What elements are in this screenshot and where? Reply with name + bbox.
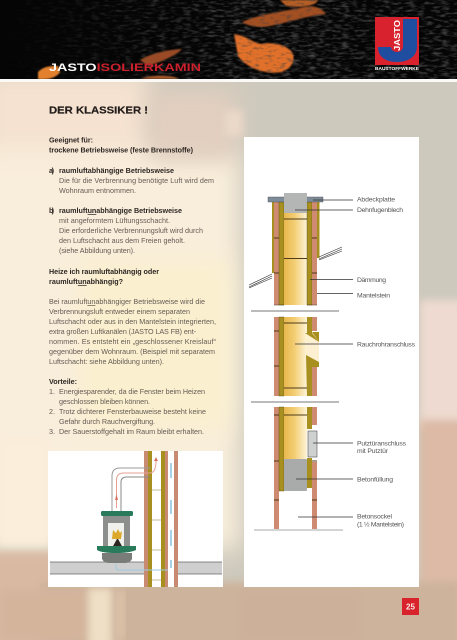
labels: Dämmung [357,277,386,284]
text block: advantages: Vorteile: [49,377,77,386]
subheading: question: Heize ich raumluftabhängig oder [49,267,159,276]
labels: Betonsockel [357,514,392,520]
logo: JASTO Baustoffwerke: BAUSTOFFWERKE [375,66,419,71]
fresh air duct with arrows [116,463,171,570]
labels: mit Putztür [357,448,389,455]
text block: b) room-air independent operation: raumluftunabhängige Betriebsweise [59,206,182,215]
text block: explanation: Verbrennungsluft entweder einem separaten [49,307,190,316]
text block: b) room-air independent operation: den Luftschacht aus dem Freien geholt. [59,236,185,245]
labels: (1 ½ Mantelstein) [357,520,404,528]
labels: Putztüranschluss [357,440,407,448]
white strip under header [0,79,457,82]
logo: JASTO Baustoffwerke: JASTO [393,20,402,51]
text block: b) room-air independent operation: Die erforderliche Verbrennungsluft wird durch [59,226,203,235]
text block: a) room-air dependent operation: raumluftabhängige Betriebsweise [59,166,174,175]
text block: advantages: 1. [49,387,55,396]
labels: Dehnfugenblech [357,207,403,214]
text block: a) room-air dependent operation: Die für die Verbrennung benötigte Luft wird dem [59,176,214,185]
panel: stove and chimney diagram [48,451,223,587]
labels: Rauchrohranschluss [357,342,416,348]
text block: b) room-air independent operation: mit angeformtem Lüftungsschacht. [59,216,170,225]
subheading: question [49,267,159,286]
logo: JASTO Baustoffwerke [375,17,419,71]
labels: Mantelstein [357,292,390,300]
text block: advantages: Trotz dichterer Fensterbauweise besteht keine [59,407,206,416]
text block: explanation [49,297,217,366]
text block: explanation: extra großen Luftkanälen (JASTO LAS FB) ent- [49,327,197,336]
heading: Der Klassiker: DER KLASSIKER ! [49,106,148,116]
text block: explanation: Luftschacht oder aus in den Mantelstein integrierten, [49,317,216,326]
panel: chimney cross-section [244,137,419,587]
text block: explanation: gegenüber dem Wohnraum. (Beispiel mit separatem [49,347,215,356]
text block: advantages: Der Sauerstoffgehalt im Raum bleibt erhalten. [59,427,204,436]
header band: dark fire photo [0,0,457,79]
text block: advantages: Energiesparender, da die Fenster beim Heizen [59,387,205,396]
text block: advantages: geschlossen bleiben können. [59,397,150,406]
text block: b) room-air independent operation: b) [49,206,55,215]
chimney shaft [144,451,178,587]
text block: advantages: 3. [49,427,55,436]
text block: a) room-air dependent operation [49,166,214,195]
floor slab [50,562,222,574]
header title: JASTO ISOLIERKAMIN: JASTO ISOLIERKAMIN [49,62,201,74]
text block: suitability [49,136,194,154]
text block: advantages [49,377,206,436]
text block: explanation: Bei raumluftunabhängiger Betriebsweise wird die [49,297,205,306]
chimney lower section with cleaning door and concrete [254,407,343,530]
labels: Betonfüllung [357,476,393,484]
text block: advantages: Gefahr durch Rauchvergiftung. [59,417,155,426]
text block: explanation: Luftschacht: siehe Abbildung unten). [49,357,164,366]
chimney middle section with flue connection [274,317,319,396]
page number badge: 25 [406,602,415,612]
flue pipe [112,457,158,511]
labels: Abdeckplatte [357,196,395,204]
page number badge [402,598,419,615]
text block: b) room-air independent operation: (siehe Abbildung unten). [59,246,135,255]
labels [357,196,416,528]
subheading: question: raumluftunabhängig? [49,277,123,286]
icon: stove [97,511,136,563]
text block: a) room-air dependent operation: a) [49,166,55,175]
chimney top section [249,193,342,305]
leader lines [295,200,353,517]
text block: advantages: 2. [49,407,55,416]
text block: suitability: Geeignet für: [49,136,93,144]
text block: b) room-air independent operation [49,206,203,255]
text block: suitability: trockene Betriebsweise (feste Brennstoffe) [49,146,194,154]
text block: explanation: nommen. Es entsteht ein „geschlossener Kreislauf“ [49,337,217,346]
text block: a) room-air dependent operation: Wohnraum entnommen. [59,186,136,195]
